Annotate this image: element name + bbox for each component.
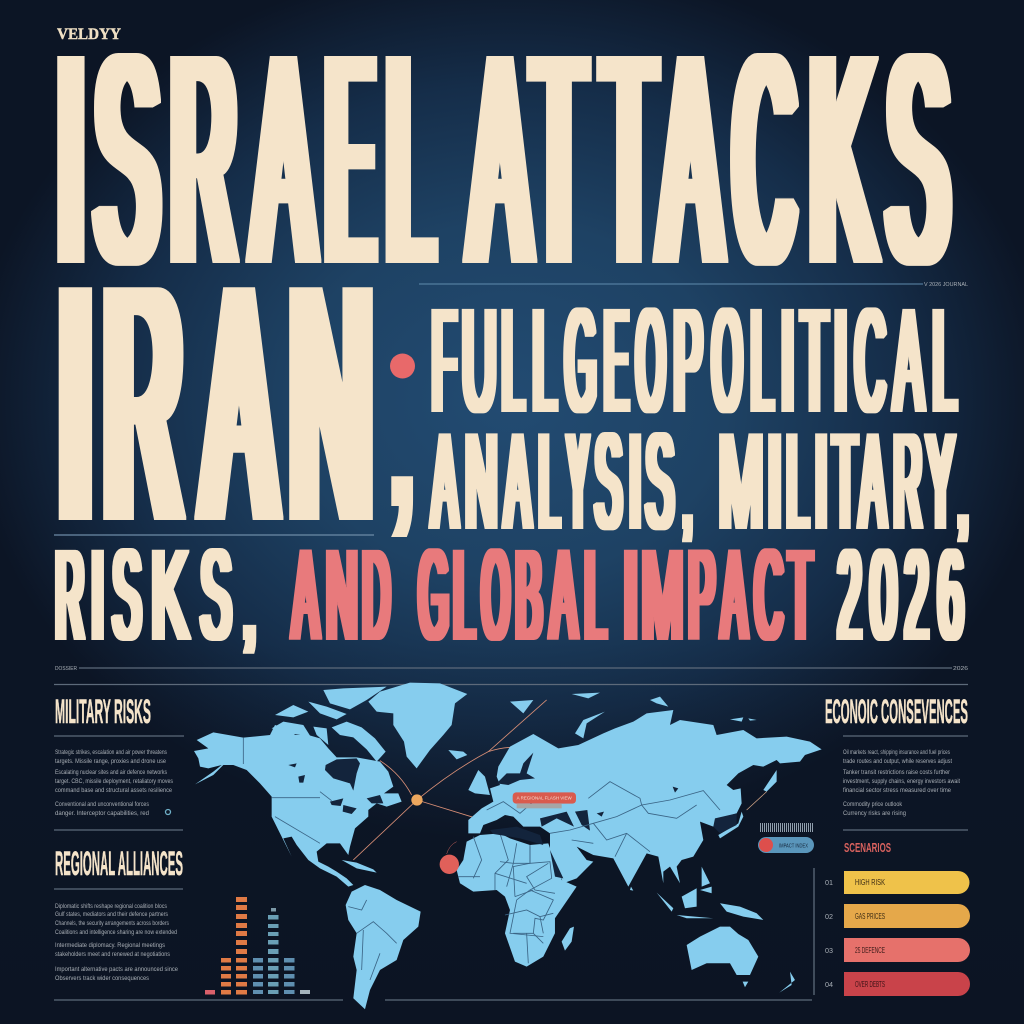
map: route line east — [747, 792, 767, 810]
subtitle: 2026: 0 — [870, 524, 896, 667]
map: red tag: A REGIONAL FLASH VIEW — [517, 796, 572, 802]
subtitle: And Global Impact: D — [363, 524, 390, 667]
infographic canvas: , — [684, 452, 690, 547]
subtitle: Full Geopolitical: A — [894, 279, 923, 443]
map: borders — [243, 738, 555, 980]
title: Iran: R — [105, 216, 181, 590]
subtitle: Military: T — [833, 405, 857, 557]
subtitle: And Global Impact: O — [482, 524, 509, 667]
body text: regional alliances — [55, 904, 179, 982]
subtitle: Risks: R — [56, 524, 84, 667]
legend icon: barcode and pill — [758, 828, 814, 853]
body text: military risks: Escalating nuclear sites and air defence networks — [55, 770, 167, 776]
subtitle: Military: I — [815, 405, 827, 557]
subtitle: Risks: K — [151, 524, 188, 667]
subtitle: And Global Impact: A — [722, 524, 747, 667]
panel: economic consequences — [758, 693, 970, 996]
body text: economic consequences: investment, supply chains, energy investors await — [843, 779, 960, 785]
bar: two: GAS PRICES — [855, 912, 885, 921]
map: Japan and Pacific islands — [630, 770, 777, 893]
subtitle: And Global Impact: N — [326, 524, 357, 667]
body text: regional alliances: Observers track wider consequences — [55, 976, 149, 982]
subtitle: Analysis: Y — [568, 405, 588, 557]
subtitle: Full Geopolitical: F — [432, 279, 456, 443]
subtitle: Military: L — [787, 405, 808, 557]
panel: military risks — [54, 693, 184, 830]
subtitle: Military: I — [767, 405, 782, 557]
infographic canvas: L — [933, 279, 956, 443]
body text: economic consequences: Oil markets react, shipping insurance and fuel prices — [843, 750, 950, 756]
subtitle: Military: A — [860, 405, 885, 557]
infographic canvas: REGIONAL ALLIANCES — [55, 845, 183, 883]
body text: economic consequences: Tanker transit restrictions raise costs further — [843, 770, 950, 776]
subtitle: Full Geopolitical: C — [855, 279, 885, 443]
subtitle: And Global Impact: C — [755, 524, 782, 667]
subtitle: Full Geopolitical: L — [533, 279, 556, 443]
body text: military risks: command base and structural assets resilience — [55, 788, 173, 794]
body text: military risks: Strategic strikes, escalation and air power threatens — [55, 750, 167, 756]
map: Eurasia, Australia — [468, 693, 822, 993]
body text: military risks: Conventional and unconventional forces — [55, 802, 149, 808]
map: seas and lakes — [288, 758, 383, 814]
title: Israel Attacks: L — [388, 0, 430, 324]
rule under Iran — [54, 534, 374, 536]
subtitle: Full Geopolitical: L — [751, 279, 773, 443]
subtitle: Full Geopolitical: L — [502, 279, 524, 443]
bar: four: 04 — [825, 982, 833, 989]
infographic canvas: S — [646, 405, 674, 557]
subtitle: Military: M — [719, 405, 763, 557]
bar chart — [205, 897, 310, 994]
subtitle: And Global Impact: M — [642, 524, 683, 667]
body text: regional alliances: Important alternative pacts are announced since — [55, 967, 179, 973]
title: Israel Attacks: T — [603, 0, 655, 324]
subtitle: Analysis: I — [629, 405, 641, 557]
map: Greenland — [368, 683, 467, 768]
map: Iceland and UK — [448, 750, 490, 795]
body text: economic consequences — [843, 750, 960, 817]
body text: economic consequences: Currency risks are rising — [843, 811, 906, 817]
map: Africa — [457, 833, 577, 967]
subtitle: And Global Impact: G — [419, 524, 448, 667]
bottom rule — [54, 999, 812, 1001]
title: Israel Attacks: A — [254, 0, 313, 324]
title comma: , — [386, 326, 418, 549]
body text: military risks: targets. Missile range, proxies and drone use — [55, 759, 167, 765]
bar: four: OVER DEBTS — [855, 980, 885, 989]
bar: three — [825, 938, 970, 962]
subtitle: Analysis: A — [505, 405, 530, 557]
map: Madagascar and Caribbean — [342, 860, 574, 951]
subtitle: And Global Impact: A — [551, 524, 577, 667]
divider — [813, 868, 815, 995]
infographic canvas: , — [244, 559, 255, 658]
body text: regional alliances: Channels, the security arrangements across borders — [55, 921, 169, 927]
heading: scenarios: SCENARIOS — [844, 840, 891, 855]
bar: three: 03 — [825, 948, 833, 955]
subtitle: Full Geopolitical: E — [604, 279, 628, 443]
body text: economic consequences: trade routes and output, while reserves adjust — [843, 759, 952, 765]
bar: two — [825, 904, 970, 928]
section rules: DOSSIER — [55, 666, 77, 672]
subtitle: 2026: 2 — [838, 524, 861, 667]
title: Israel Attacks: K — [810, 0, 875, 324]
subtitle: Full Geopolitical: I — [834, 279, 848, 443]
body text: economic consequences: Commodity price outlook — [843, 802, 903, 808]
subtitle: Military: R — [894, 405, 922, 557]
subtitle: Analysis: L — [539, 405, 559, 557]
title: Israel Attacks: C — [735, 0, 794, 324]
red dot — [390, 354, 415, 378]
body text: regional alliances: stakeholders meet and renewed at negotiations — [55, 952, 170, 958]
subtitle: Full Geopolitical: T — [801, 279, 828, 443]
legend icon: barcode and pill: IMPACT INDEX — [779, 844, 808, 850]
map: route lines — [353, 700, 547, 860]
body text: regional alliances: Diplomatic shifts reshape regional coalition blocs — [55, 904, 167, 910]
map: Southeast Asia islands — [657, 888, 763, 920]
infographic canvas: MILITARY RISKS — [55, 693, 151, 731]
section rules: 2026 — [953, 666, 968, 672]
map: Arctic islands — [510, 693, 757, 738]
body text: military risks: target. CBC, missile deployment, retaliatory moves — [55, 779, 173, 785]
subtitle: Full Geopolitical: G — [565, 279, 596, 443]
subtitle: Analysis: A — [432, 405, 457, 557]
title: Israel Attacks: A — [471, 0, 529, 324]
body text: regional alliances: Gulf states, mediators and their defence partners — [55, 912, 168, 918]
map: country borders — [487, 782, 720, 937]
title: Iran: I — [57, 216, 94, 590]
map: Australia — [687, 927, 795, 993]
top rule with caption: V 2026 JOURNAL — [924, 282, 968, 288]
bar: one: 01 — [825, 880, 833, 887]
infographic canvas: 6 — [938, 524, 963, 667]
map: hub marker — [411, 794, 423, 806]
subtitle: Full Geopolitical: I — [781, 279, 795, 443]
subtitle: Full Geopolitical: U — [462, 279, 496, 443]
subtitle: Risks: S — [113, 524, 141, 667]
subtitle: And Global Impact: B — [516, 524, 542, 667]
infographic canvas: , — [959, 452, 967, 547]
body text: regional alliances: Intermediate diplomacy. Regional meetings — [55, 943, 165, 949]
infographic canvas: T — [789, 524, 812, 667]
subtitle: Full Geopolitical: O — [636, 279, 665, 443]
icon: shield — [166, 810, 170, 814]
infographic canvas: N — [290, 216, 372, 590]
subtitle: Analysis: S — [595, 405, 622, 557]
world map — [194, 683, 822, 1009]
body text: military risks: danger. Interceptor capabilities, red — [55, 811, 149, 817]
map: red marker — [440, 855, 459, 874]
title: Israel Attacks: A — [661, 0, 720, 324]
map: South America — [346, 885, 421, 1009]
subtitle: And Global Impact: P — [689, 524, 715, 667]
bar: three: 25 DEFENCE — [855, 946, 885, 955]
body text: regional alliances: Coalitions and intelligence sharing are now extended — [55, 930, 177, 936]
title: Israel Attacks: T — [533, 0, 585, 324]
infographic canvas: Y — [927, 405, 954, 557]
subtitle: And Global Impact: L — [585, 524, 605, 667]
subtitle: And Global Impact: L — [454, 524, 474, 667]
title: Iran: A — [204, 216, 274, 590]
bar: one: HIGH RISK — [855, 878, 885, 887]
subtitle: Risks: I — [91, 524, 104, 667]
body text: economic consequences: financial sector stress measured over time — [843, 788, 952, 794]
map: inner seas — [490, 753, 737, 878]
panel: regional alliances — [54, 845, 183, 982]
bar: four — [825, 972, 970, 996]
title: Israel Attacks: E — [328, 0, 372, 324]
map: Americas, Greenland, Africa — [194, 683, 577, 1009]
logo: VELDYY — [57, 26, 121, 43]
title: Israel Attacks: I — [57, 0, 85, 324]
subtitle: 2026: 2 — [905, 524, 928, 667]
title: Israel Attacks: S — [96, 0, 158, 324]
subtitle: And Global Impact: I — [622, 524, 639, 667]
subtitle: Full Geopolitical: O — [712, 279, 742, 443]
bar: one — [825, 871, 970, 894]
body text: military risks — [55, 750, 173, 817]
subtitle: Risks: S — [201, 524, 231, 667]
title: Israel Attacks: R — [172, 0, 235, 324]
subtitle: Full Geopolitical: P — [674, 279, 702, 443]
map: red tag — [513, 792, 576, 808]
subtitle: Analysis: N — [466, 405, 497, 557]
section rules — [54, 666, 968, 684]
bar: two: 02 — [825, 914, 833, 921]
subtitle: And Global Impact: A — [293, 524, 319, 667]
